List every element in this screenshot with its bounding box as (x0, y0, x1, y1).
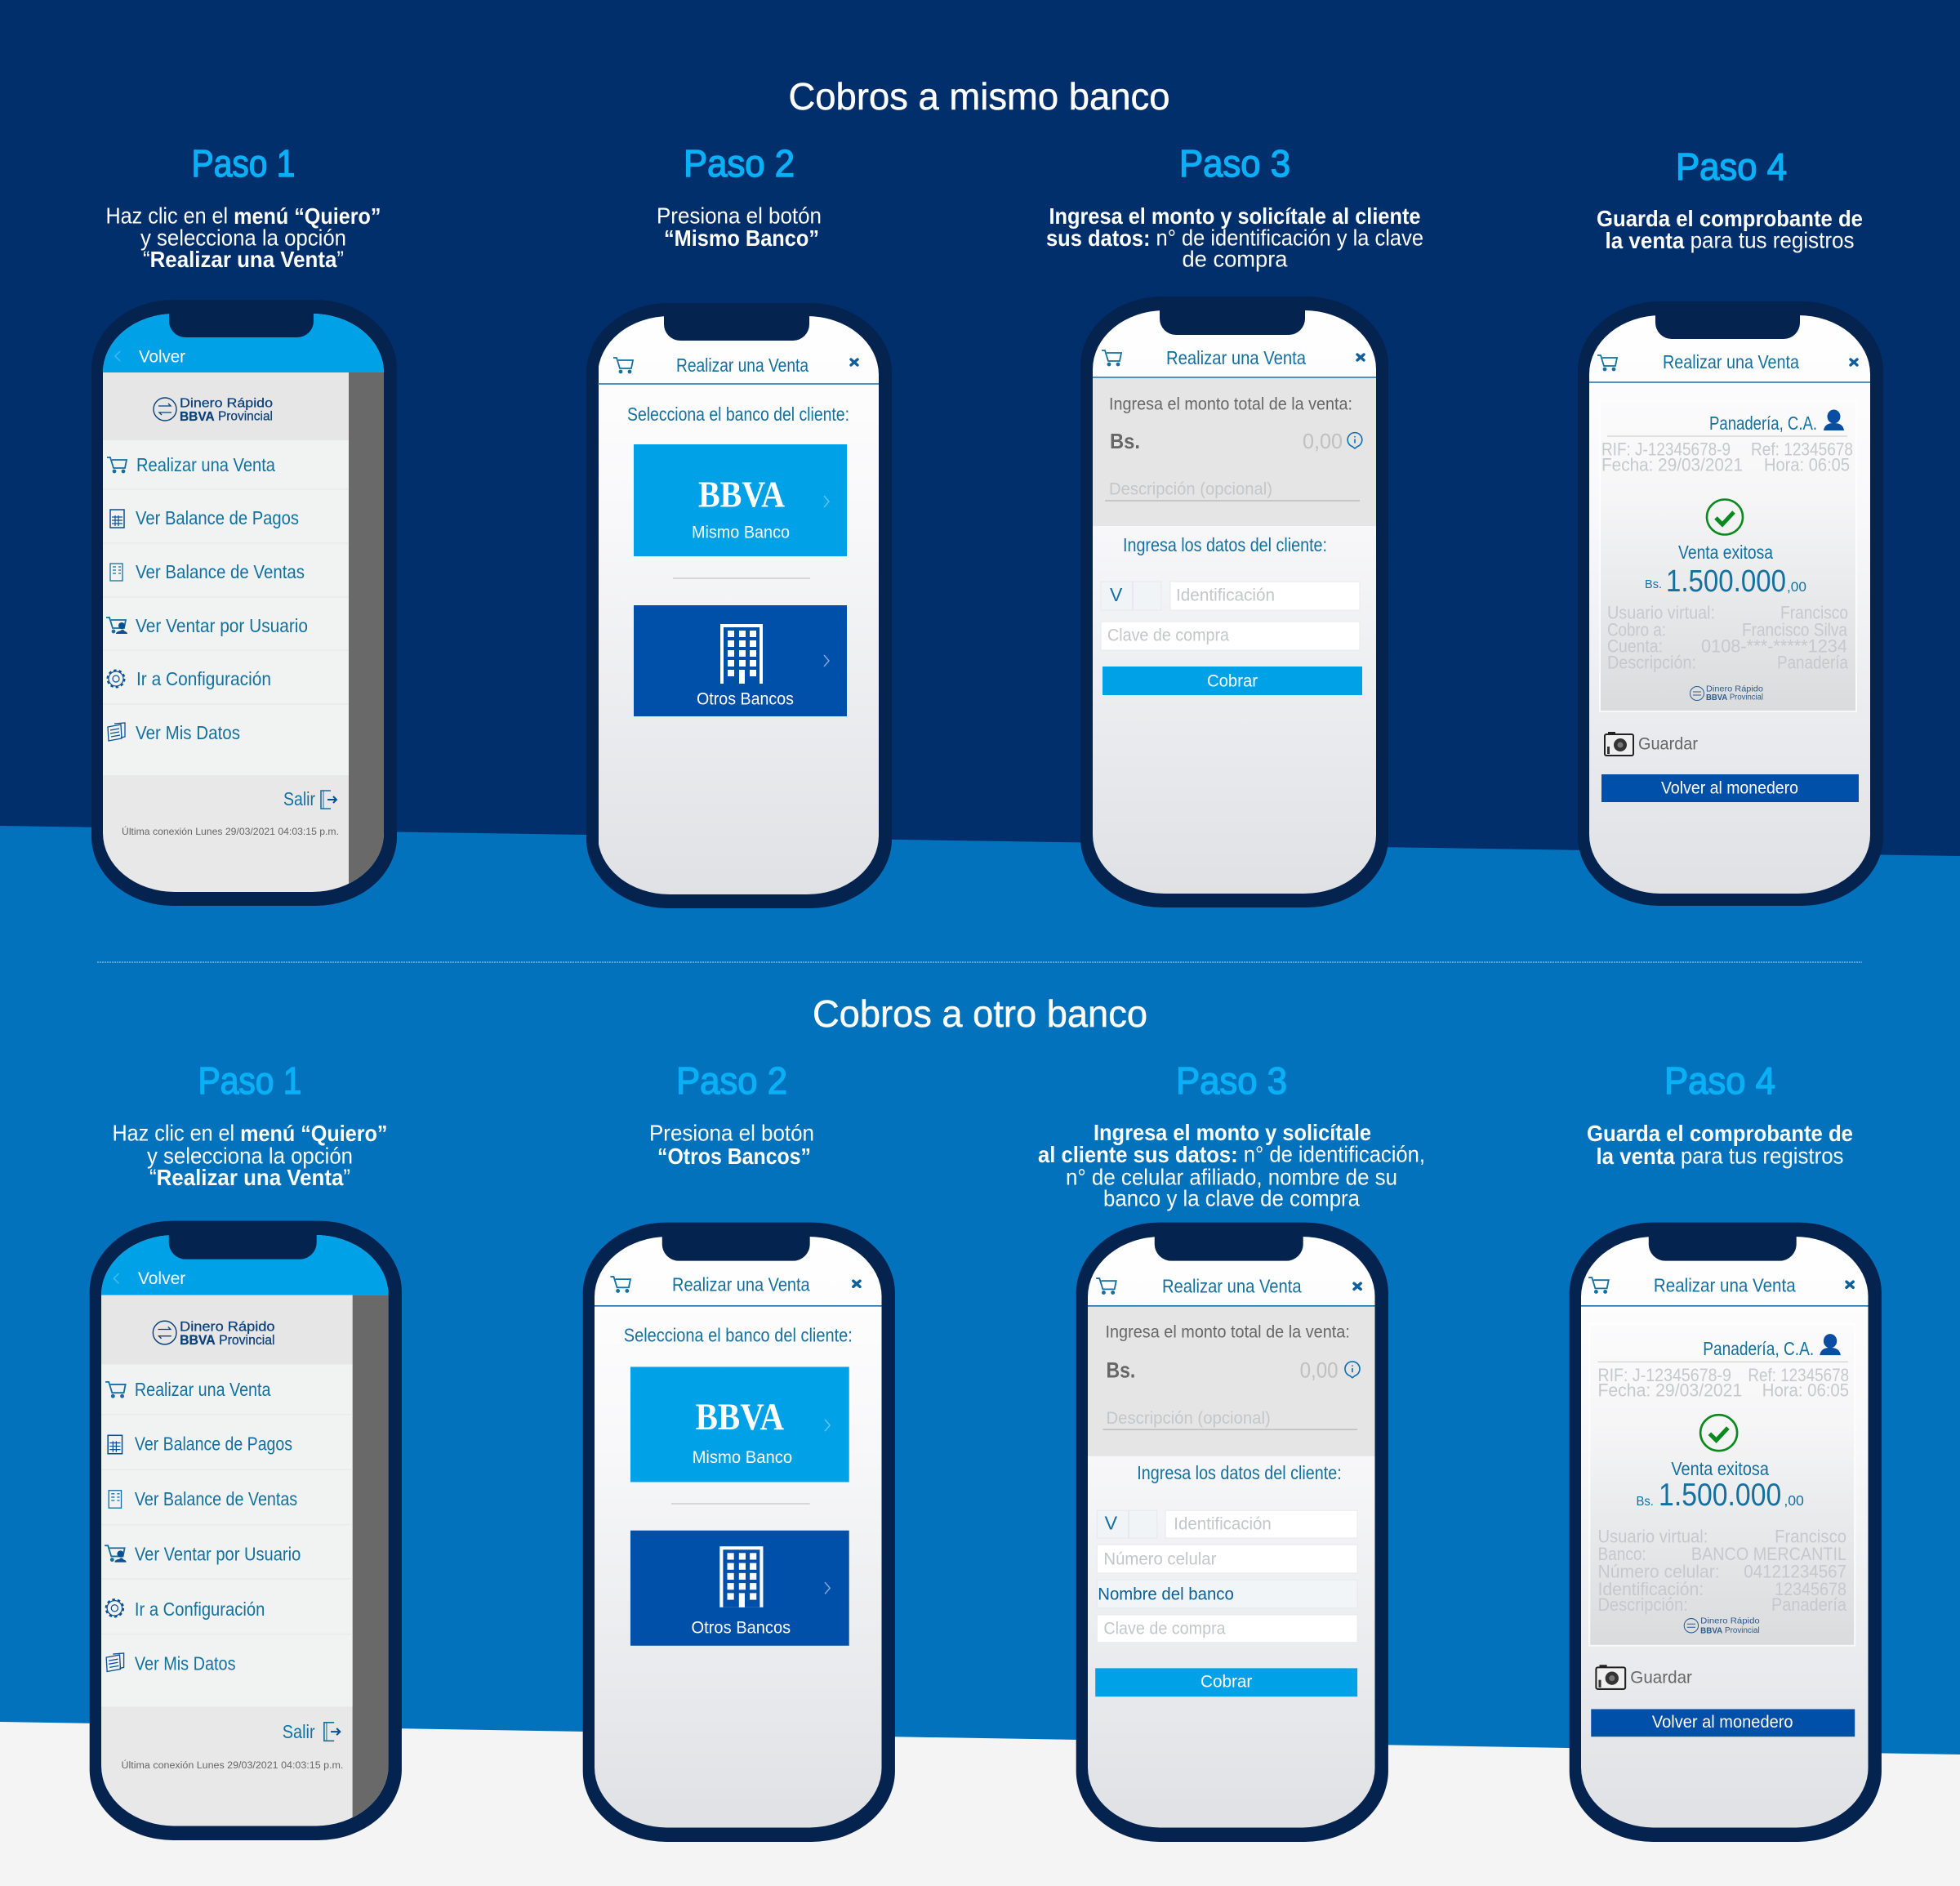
exit: Salir: Salir (283, 1721, 315, 1742)
receipt details: 04121234567 (1744, 1561, 1846, 1581)
text block: top paso 3 instructions (1046, 203, 1423, 271)
button: Volver al monedero (1601, 774, 1859, 802)
amount: 1.500.000 (1666, 564, 1786, 599)
screen header: Realizar una Venta (1663, 351, 1799, 372)
phone: bottom paso 1 menu (90, 1221, 402, 1840)
field: document type: V (1104, 1513, 1117, 1534)
notch (662, 1236, 810, 1261)
field: document type (1097, 1510, 1157, 1538)
button: Cobrar (1095, 1668, 1357, 1697)
notch (169, 313, 314, 337)
text block: top paso 2 instructions: “Mismo Banco” (664, 225, 819, 250)
title: Cobros a otro banco: Cobros a otro banco (813, 992, 1147, 1035)
notch (1155, 1236, 1303, 1261)
heading: bottom Paso 3: Paso 3 (1176, 1059, 1287, 1102)
text: Venta exitosa: Venta exitosa (1678, 542, 1773, 563)
text block: bottom paso 3 instructions: al cliente sus datos: n° de identificación, (1038, 1142, 1425, 1166)
text block: top paso 1 instructions: Haz clic en el menú “Quiero” (106, 203, 381, 229)
menu list (106, 454, 308, 743)
text block: top paso 4 instructions: Guarda el comprobante de (1597, 206, 1863, 230)
field: description: Descripción (opcional) (1109, 480, 1272, 498)
receipt card (1599, 400, 1857, 712)
menu item: Ver Ventar por Usuario: Ver Ventar por Usuario (135, 1543, 301, 1564)
icon: user (1824, 410, 1844, 430)
receipt details: Número celular: (1597, 1561, 1720, 1581)
save action (1605, 732, 1698, 756)
button: Mismo Banco: Mismo Banco (692, 523, 790, 542)
icon: papers (106, 1653, 124, 1672)
notch (1649, 1236, 1797, 1261)
icon: success check (1700, 1415, 1737, 1451)
header: Volver: Volver (139, 348, 185, 366)
header: Volver (114, 1268, 185, 1288)
field: mobile number (1097, 1545, 1357, 1573)
notch (169, 1234, 317, 1260)
small logo: BBVA Provincial (1700, 1626, 1760, 1635)
receipt details: Identificación: (1597, 1579, 1704, 1599)
text block: bottom paso 1 instructions: “Realizar una Venta” (149, 1165, 350, 1189)
icon: cart with user (106, 618, 127, 634)
menu item: Realizar una Venta: Realizar una Venta (135, 1379, 271, 1400)
text block: top paso 2 instructions: Presiona el botón (657, 203, 822, 229)
heading: bottom Paso 1: Paso 1 (198, 1059, 302, 1102)
receipt details: Francisco Silva (1742, 619, 1848, 640)
text: last connection: Última conexión Lunes 29/03/2021 04:03:15 p.m. (122, 1759, 343, 1771)
header: Volver: Volver (138, 1268, 185, 1288)
receipt reference lines: Ref: 12345678 (1751, 439, 1853, 459)
logo: Dinero Rápido BBVA Provincial (154, 397, 273, 423)
receipt details: Francisco (1775, 1526, 1846, 1546)
heading: top Paso 2: Paso 2 (684, 142, 795, 185)
receipt details: Cobro a: (1607, 619, 1666, 640)
menu item: Ver Mis Datos: Ver Mis Datos (135, 1652, 236, 1674)
button: Volver al monedero: Volver al monedero (1652, 1712, 1793, 1732)
field: purchase key: Clave de compra (1107, 626, 1229, 645)
exit: Salir: Salir (283, 788, 315, 809)
button: Otros Bancos (630, 1531, 849, 1646)
text block: top paso 1 instructions: y selecciona la opción (140, 225, 346, 250)
phone: bottom paso 2 bank selection (583, 1223, 895, 1842)
menu item: Ver Mis Datos: Ver Mis Datos (136, 722, 240, 743)
button: Mismo Banco (634, 444, 847, 556)
text: amount prompt: Ingresa el monto total de la venta: (1109, 395, 1352, 413)
logo: Dinero Rápido BBVA Provincial: BBVA Provincial (180, 1333, 275, 1348)
field: purchase key: Clave de compra (1103, 1618, 1226, 1638)
field: mobile number: Número celular (1103, 1549, 1216, 1568)
icon: cart (107, 457, 127, 472)
amount row: Bs. (1110, 429, 1140, 453)
field: identification (1165, 1510, 1357, 1538)
save action: Guardar (1630, 1668, 1692, 1688)
merchant name: Panadería, C.A. (1703, 1338, 1814, 1359)
screen header: Realizar una Venta (1166, 347, 1306, 368)
text block: bottom paso 2 instructions (649, 1121, 814, 1168)
text block: bottom paso 2 instructions: Presiona el botón (649, 1121, 814, 1145)
heading: bottom Paso 4: Paso 4 (1664, 1059, 1775, 1102)
amount row: 0,00 (1303, 429, 1343, 453)
receipt details: Francisco (1780, 603, 1848, 622)
button: Mismo Banco: BBVA (698, 474, 785, 515)
text block: top paso 3 instructions: de compra (1183, 247, 1288, 271)
text block: bottom paso 1 instructions: Haz clic en el menú “Quiero” (113, 1121, 387, 1145)
receipt details: Banco: (1597, 1544, 1646, 1564)
button: Volver al monedero (1591, 1709, 1855, 1737)
screen header (595, 1273, 882, 1306)
screen header (1093, 347, 1376, 377)
field: description: Descripción (opcional) (1106, 1408, 1271, 1428)
receipt details: 12345678 (1775, 1579, 1846, 1599)
icon: cart (105, 1382, 126, 1398)
logo: Dinero Rápido BBVA Provincial: Dinero Rápido (180, 1319, 275, 1334)
text: Venta exitosa: Venta exitosa (1671, 1458, 1770, 1479)
screen header (1581, 1274, 1869, 1306)
receipt details (1597, 1526, 1846, 1615)
text: amount prompt: Ingresa el monto total de la venta: (1105, 1322, 1350, 1342)
text block: top paso 3 instructions: Ingresa el monto y solicítale al cliente (1049, 203, 1421, 229)
text block: top paso 4 instructions (1597, 206, 1863, 253)
button: Cobrar: Cobrar (1200, 1672, 1252, 1692)
phone: top paso 2 bank selection (586, 303, 892, 908)
text: last connection: Última conexión Lunes 29/03/2021 04:03:15 p.m. (122, 825, 339, 837)
receipt reference lines: Hora: 06:05 (1764, 454, 1850, 475)
text block: bottom paso 3 instructions: Ingresa el monto y solicítale (1094, 1119, 1371, 1145)
button: Otros Bancos: Otros Bancos (692, 1617, 791, 1637)
receipt reference lines: RIF: J-12345678-9 (1597, 1365, 1731, 1385)
icon: calculator (108, 1435, 122, 1454)
heading: top Paso 1: Paso 1 (191, 142, 296, 185)
text: select client bank: Selecciona el banco del cliente: (627, 404, 849, 425)
text: client data prompt: Ingresa los datos del cliente: (1123, 534, 1327, 555)
receipt details: Panadería (1777, 652, 1849, 673)
phone: top paso 3 amount form (1080, 296, 1388, 907)
field: bank name: Nombre del banco (1098, 1584, 1234, 1603)
heading: bottom Paso 2: Paso 2 (676, 1059, 787, 1102)
text block: bottom paso 4 instructions (1587, 1121, 1853, 1168)
field: document type: V (1110, 584, 1123, 605)
notch (1160, 310, 1305, 335)
screen header: Realizar una Venta (672, 1273, 810, 1295)
small logo: BBVA Provincial (1706, 693, 1763, 702)
background: light footer band (0, 1722, 1960, 1886)
button: Otros Bancos (634, 605, 847, 716)
menu item: Ver Ventar por Usuario: Ver Ventar por Usuario (136, 615, 308, 636)
small logo (1690, 684, 1763, 702)
menu item: Realizar una Venta: Realizar una Venta (136, 454, 275, 475)
merchant name: Panadería, C.A. (1709, 412, 1817, 434)
text block: bottom paso 2 instructions: “Otros Bancos” (657, 1144, 811, 1168)
receipt details: Cuenta: (1607, 635, 1663, 657)
amount row (1110, 429, 1362, 453)
receipt reference lines: Ref: 12345678 (1748, 1365, 1849, 1385)
phone: bottom paso 3 amount and bank form (1076, 1223, 1388, 1842)
title: Cobros a mismo banco: Cobros a mismo banco (789, 75, 1169, 118)
field: purchase key (1101, 622, 1360, 650)
text block: top paso 1 instructions (106, 203, 381, 271)
exit: Salir (283, 1721, 340, 1742)
screen header (598, 354, 879, 384)
icon: ledger (109, 1491, 122, 1508)
amount: ,00 (1784, 1492, 1804, 1509)
receipt reference lines (1601, 439, 1853, 475)
heading: top Paso 3: Paso 3 (1179, 142, 1290, 185)
text block: bottom paso 4 instructions: la venta para tus registros (1596, 1144, 1844, 1168)
screen header (1589, 351, 1870, 382)
screen header (1088, 1275, 1375, 1306)
menu item: Ver Balance de Ventas: Ver Balance de Ventas (135, 1488, 297, 1509)
receipt reference lines: Hora: 06:05 (1762, 1380, 1849, 1401)
text block: top paso 3 instructions: sus datos: n° de identificación y la clave (1046, 225, 1423, 250)
small logo: Dinero Rápido (1706, 684, 1763, 694)
text block: bottom paso 3 instructions (1038, 1119, 1425, 1211)
small logo: Dinero Rápido (1700, 1617, 1760, 1626)
receipt details: Descripción: (1597, 1594, 1688, 1615)
text block: top paso 2 instructions (657, 203, 822, 250)
receipt details: Panadería (1771, 1594, 1846, 1615)
icon: ledger (110, 564, 122, 581)
screen header: Realizar una Venta (1654, 1274, 1796, 1295)
receipt details: Usuario virtual: (1597, 1526, 1708, 1546)
menu item: Ver Balance de Pagos: Ver Balance de Pagos (136, 507, 299, 528)
icon: gear (108, 670, 124, 688)
menu item: Ver Balance de Pagos: Ver Balance de Pagos (135, 1433, 292, 1454)
receipt details: Usuario virtual: (1607, 603, 1715, 622)
logo: Dinero Rápido BBVA Provincial: Dinero Rápido (180, 397, 273, 410)
icon: gear (106, 1599, 123, 1617)
text block: bottom paso 4 instructions: Guarda el comprobante de (1587, 1121, 1853, 1145)
heading: top Paso 4: Paso 4 (1676, 145, 1787, 188)
button: Otros Bancos: Otros Bancos (697, 689, 794, 709)
field: document type (1101, 582, 1161, 610)
field: purchase key (1097, 1615, 1357, 1643)
amount: Bs. (1636, 1495, 1654, 1509)
receipt details (1607, 603, 1849, 673)
receipt card (1588, 1323, 1855, 1647)
field: bank name (1097, 1580, 1357, 1608)
receipt reference lines: Fecha: 29/03/2021 (1601, 454, 1743, 475)
field: identification: Identificación (1176, 586, 1275, 604)
receipt reference lines: Fecha: 29/03/2021 (1597, 1380, 1742, 1401)
small logo (1684, 1617, 1760, 1635)
icon: user (1820, 1334, 1841, 1355)
phone: top paso 1 menu (91, 300, 397, 906)
icon: cart with user (105, 1545, 127, 1563)
amount: 1.500.000 (1659, 1478, 1781, 1513)
icon: calculator (110, 510, 124, 528)
amount row (1106, 1358, 1360, 1383)
receipt reference lines: RIF: J-12345678-9 (1601, 439, 1731, 459)
field: identification (1170, 582, 1360, 610)
receipt details: BANCO MERCANTIL (1691, 1544, 1846, 1564)
menu item: Ver Balance de Ventas: Ver Balance de Ventas (136, 561, 305, 582)
header: Volver (115, 348, 185, 366)
receipt details: 0108-***-*****1234 (1701, 635, 1847, 657)
notch (664, 315, 809, 341)
receipt reference lines (1597, 1365, 1849, 1401)
menu item: Ir a Configuración: Ir a Configuración (135, 1598, 265, 1620)
text block: bottom paso 3 instructions: n° de celular afiliado, nombre de su (1066, 1165, 1397, 1189)
icon: success check (1707, 500, 1743, 534)
amount: Bs. (1645, 577, 1662, 591)
background: blue section (0, 826, 1960, 1886)
amount: ,00 (1787, 579, 1806, 595)
amount row: 0,00 (1300, 1358, 1339, 1383)
text block: top paso 1 instructions: “Realizar una Venta” (143, 247, 344, 271)
logo: Dinero Rápido BBVA Provincial: BBVA Provincial (180, 410, 273, 423)
icon: papers (108, 723, 125, 741)
logo: Dinero Rápido BBVA Provincial (153, 1319, 275, 1348)
text: select client bank: Selecciona el banco del cliente: (624, 1325, 853, 1346)
button: Mismo Banco: BBVA (696, 1396, 784, 1438)
screen header: Realizar una Venta (1162, 1275, 1302, 1296)
amount row: Bs. (1106, 1358, 1135, 1383)
button: Volver al monedero: Volver al monedero (1661, 779, 1798, 797)
button: Mismo Banco (630, 1367, 849, 1482)
phone: bottom paso 4 receipt (1570, 1223, 1882, 1842)
receipt details: Descripción: (1607, 652, 1696, 673)
menu list (105, 1379, 301, 1674)
menu item: Ir a Configuración: Ir a Configuración (136, 668, 271, 689)
button: Cobrar (1102, 667, 1362, 695)
save action: Guardar (1638, 735, 1698, 753)
notch (1655, 314, 1800, 339)
text block: bottom paso 3 instructions: banco y la clave de compra (1103, 1186, 1360, 1211)
field: identification: Identificación (1174, 1514, 1272, 1534)
text block: bottom paso 1 instructions (113, 1121, 387, 1189)
text: client data prompt: Ingresa los datos del cliente: (1137, 1462, 1342, 1483)
button: Cobrar: Cobrar (1207, 671, 1258, 691)
button: Mismo Banco: Mismo Banco (693, 1447, 792, 1467)
save action (1596, 1665, 1692, 1689)
text block: bottom paso 1 instructions: y selecciona la opción (147, 1144, 353, 1168)
phone: top paso 4 receipt (1578, 301, 1883, 906)
screen header: Realizar una Venta (676, 354, 808, 376)
text block: top paso 4 instructions: la venta para tus registros (1606, 227, 1854, 253)
